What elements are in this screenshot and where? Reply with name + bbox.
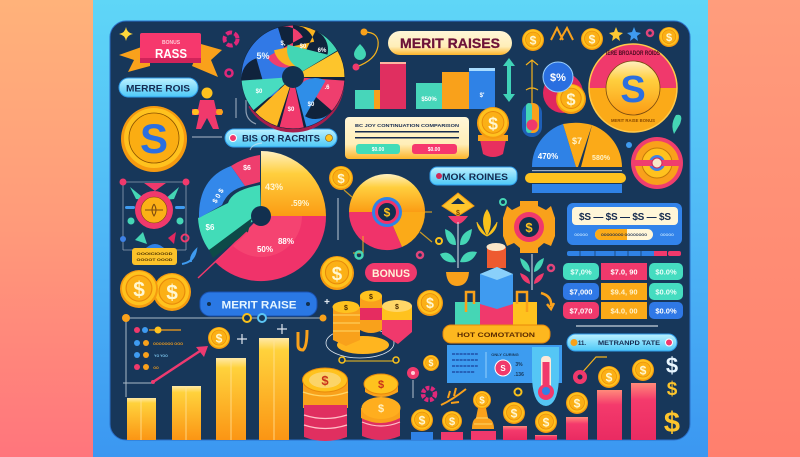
coin top 1: $ [530, 33, 537, 47]
growth arrow [151, 346, 208, 384]
bottom coin row: $ [419, 413, 426, 427]
small yellow note: OOOICIOOOD [136, 251, 173, 256]
data table: $0.0% [655, 306, 677, 316]
pill: MERRE ROIS: MERRE ROIS [126, 84, 190, 94]
teal ring [500, 199, 506, 205]
legend rows [134, 326, 183, 370]
yellow banner: HOT COMPUTATION [443, 325, 550, 343]
data table: $7.0, 90 [610, 268, 638, 276]
tall coin stack 1 [302, 368, 348, 441]
thermometer [532, 347, 559, 406]
card: job continuation comparison: $0.00 [428, 147, 440, 153]
bottom coin row: $ [511, 406, 518, 420]
sparkle star [119, 27, 133, 41]
ribbon banner: RASS [119, 33, 222, 77]
card: job continuation comparison: BC JOY CONTINUATION COMPARISON [355, 123, 459, 128]
ribbon banner: RASS: BONUS [162, 40, 181, 46]
pink bars with coins, right: $ [640, 363, 647, 377]
dollar signs column: $ [666, 353, 678, 378]
large segmented pie chart: $6 [206, 223, 215, 232]
circular badge with blue dollar: MERIT RAISE BONUS [611, 118, 655, 123]
large coin with blue dollar sign [121, 106, 187, 172]
pink bars with coins, right [566, 359, 656, 440]
wheat icon [477, 210, 497, 236]
pink bars with coins, right: $ [606, 370, 613, 384]
donut pie chart top: .6 [324, 85, 330, 91]
coin above arrow: $ [216, 331, 223, 345]
poker chip and coin cluster: $% [550, 72, 566, 84]
outer blue frame [93, 0, 708, 457]
vertical line [337, 198, 339, 240]
donut pie chart top: $, [280, 41, 286, 47]
yellow bar chart bottom left [127, 338, 289, 440]
circular gauge with dollar center: $ [384, 206, 391, 220]
small coin [423, 355, 439, 371]
small gear icon [224, 32, 238, 46]
ring pink right [548, 265, 554, 271]
blue slider card [567, 203, 682, 245]
coin mid: $ [426, 296, 434, 312]
card: job continuation comparison: $0.00 [372, 147, 384, 153]
teal double arrow [503, 58, 515, 102]
half pie on base: 580% [592, 155, 611, 162]
blue info panel: S [500, 364, 506, 373]
circular gauge with dollar center [349, 174, 425, 250]
orange gear with dollar [503, 201, 555, 253]
isometric coin stacks on platform [326, 290, 412, 363]
blue info panel: 3% [515, 362, 523, 368]
data table: $7,070 [570, 306, 592, 316]
connector lines [192, 98, 262, 150]
star icon blue [627, 27, 641, 41]
pink bars with coins, right: $ [574, 396, 581, 410]
donut pie chart top: 6% [318, 48, 327, 54]
star icon gold [609, 27, 623, 41]
ribbon banner: RASS: RASS [155, 46, 187, 61]
teal leaf [672, 115, 681, 134]
divider with sparkle [576, 325, 658, 327]
node diagram with emblem [120, 178, 190, 250]
isometric coin stacks on platform: $ [344, 305, 348, 312]
data table: $9.4, 90 [610, 288, 638, 296]
curved orange arrow [541, 293, 554, 309]
half pie on base: $7 [572, 136, 582, 146]
coin top 3: $ [666, 32, 672, 44]
yellow hook icon [298, 330, 307, 350]
ring yellow near gauge [436, 238, 442, 244]
coin above arrow [208, 327, 230, 349]
pill: MERIT RAISES: MERIT RAISES [400, 35, 500, 51]
coin next to pie [329, 166, 353, 190]
lollipop node [407, 367, 419, 398]
coin over pink cup: $ [488, 113, 498, 133]
pill: MERIT RAISES [388, 31, 512, 55]
squiggle icon [182, 250, 196, 264]
blue info panel [447, 345, 562, 383]
pill: METRANPD TATE: 11. [578, 341, 586, 347]
pink ring node [573, 357, 607, 384]
dollar signs column [664, 353, 680, 439]
blue info panel: ONLY CURING [491, 352, 519, 357]
large segmented pie chart: 50% [257, 245, 273, 254]
donut pie chart top: $0 [300, 44, 307, 50]
coin top 2 [581, 28, 603, 50]
coin stack 2 [361, 374, 400, 440]
coin stack 2: $ [378, 403, 384, 415]
large segmented pie chart: 88% [278, 237, 294, 246]
bottom coin row: $ [449, 416, 455, 428]
coin top 1 [522, 29, 544, 51]
circular badge with blue dollar: IERE BROADOR ROIDS [606, 51, 660, 57]
coin pair: $ [166, 282, 178, 305]
dollar signs column: $ [667, 379, 678, 400]
ring blue [626, 142, 632, 148]
pill: MERIT RAISE: MERIT RAISE [222, 300, 296, 312]
large segmented pie chart: $6 [243, 165, 251, 172]
isometric coin stacks on platform: $ [369, 294, 373, 301]
large coin with blue dollar sign: S [140, 115, 168, 162]
pill: MERIT RAISE [200, 292, 317, 316]
blue info panel: .136 [514, 372, 524, 378]
bottom coin row: $ [543, 415, 550, 429]
donut pie chart top [249, 33, 337, 121]
dollar signs column: $ [664, 407, 680, 439]
coin mid [417, 290, 443, 316]
background: right gradient strip [706, 0, 800, 457]
gold diamond and plant [440, 193, 477, 286]
ring pink lower [417, 252, 423, 258]
navy main panel [110, 21, 690, 440]
donut pie chart top: 5% [256, 51, 270, 61]
ring pink [647, 30, 653, 36]
coin top 2: $ [589, 32, 596, 46]
data table: $0.0% [655, 268, 677, 276]
small yellow note: OOOOT OOOD [136, 257, 173, 262]
background: left gradient strip [0, 0, 94, 457]
pill: METRANPD TATE [567, 334, 677, 351]
legend rows: OOOOOOO OOO [153, 342, 183, 346]
ring decoration [226, 70, 232, 76]
coin top 3 [659, 27, 679, 47]
plus signs [237, 299, 330, 344]
pill: BONUS: BONUS [372, 268, 410, 280]
poker chip and coin cluster [543, 62, 586, 114]
coin pair [120, 270, 191, 311]
pill: MERRE ROIS [119, 78, 198, 97]
circular badge with blue dollar: S [620, 69, 646, 111]
gold branch icon [441, 388, 466, 405]
pill: MOK ROINES: MOK ROINES [442, 172, 508, 182]
legend rows: YO YOO [154, 354, 168, 358]
second plant [520, 254, 544, 290]
bar chart top middle: $' [480, 93, 485, 99]
bar chart top middle [355, 62, 495, 109]
pink gear icon [423, 388, 435, 400]
legend rows: OO [153, 366, 159, 370]
data table: $7,000 [570, 288, 592, 296]
bottom coin row [411, 391, 557, 440]
arrow line from pie [198, 232, 247, 278]
large segmented pie chart: $ 0 $ [212, 188, 226, 205]
coin stack 2: $ [378, 379, 384, 391]
vertical slider gauge [522, 60, 542, 137]
data table: $4.0, 00 [610, 306, 638, 316]
bar chart top middle: $50% [421, 97, 437, 103]
donut pie chart top: $0 [256, 89, 263, 95]
small yellow note [132, 248, 177, 265]
large segmented pie chart: .59% [291, 199, 309, 208]
large segmented pie chart: 43% [265, 182, 283, 192]
orange gear with dollar: $ [525, 220, 533, 235]
connector lines around gauge [344, 190, 432, 253]
donut pie chart top: $0 [308, 102, 315, 108]
half pie on base: 470% [538, 152, 558, 161]
coin next to pie: $ [337, 171, 345, 186]
blue slider card: OOOOOOOO OOOOOOOO [601, 233, 647, 237]
pill: BIS OR RACRITS: BIS OR RACRITS [242, 134, 320, 144]
coin pair: $ [133, 279, 145, 302]
yellow banner: HOT COMPUTATION: HOT COMOTATION [457, 332, 535, 339]
donut pie chart top: $0 [288, 107, 295, 113]
isometric coin stacks on platform: $ [395, 304, 399, 311]
data table [563, 263, 683, 319]
blue slider card: $S — $S — $S — $S [579, 212, 671, 223]
small coin: $ [429, 358, 434, 368]
timeline with nodes [122, 314, 326, 397]
target emblem [631, 137, 683, 189]
circular badge with blue dollar [589, 44, 677, 132]
pill: METRANPD TATE: METRANPD TATE [598, 340, 661, 347]
small linked node icon [352, 28, 378, 70]
pill: BIS OR RACRITS [225, 129, 337, 147]
half pie on base [525, 123, 626, 193]
data table: $7,0% [570, 268, 592, 276]
accent ring teal lower [356, 252, 362, 258]
bottom coin row: $ [479, 396, 485, 407]
card: job continuation comparison [345, 117, 469, 159]
blue slider card: OOOOO [574, 233, 588, 237]
coin below pie: $ [332, 263, 343, 284]
coin below pie [320, 256, 354, 290]
up arrows icon [551, 28, 573, 40]
pill: BONUS [365, 263, 417, 282]
blue slider card: OOOOO [660, 233, 674, 237]
gold diamond and plant: $ [456, 210, 460, 217]
isometric boxes [455, 243, 537, 325]
poker chip and coin cluster: $ [566, 91, 576, 109]
large segmented pie chart [198, 151, 326, 281]
data table: $0.0% [655, 288, 677, 296]
tall coin stack 1: $ [321, 373, 329, 388]
yellow ring [514, 388, 522, 396]
coin over pink cup [477, 107, 509, 157]
pill: MOK ROINES [430, 167, 517, 185]
segmented progress bar [567, 251, 681, 256]
person figure icon [192, 88, 223, 129]
